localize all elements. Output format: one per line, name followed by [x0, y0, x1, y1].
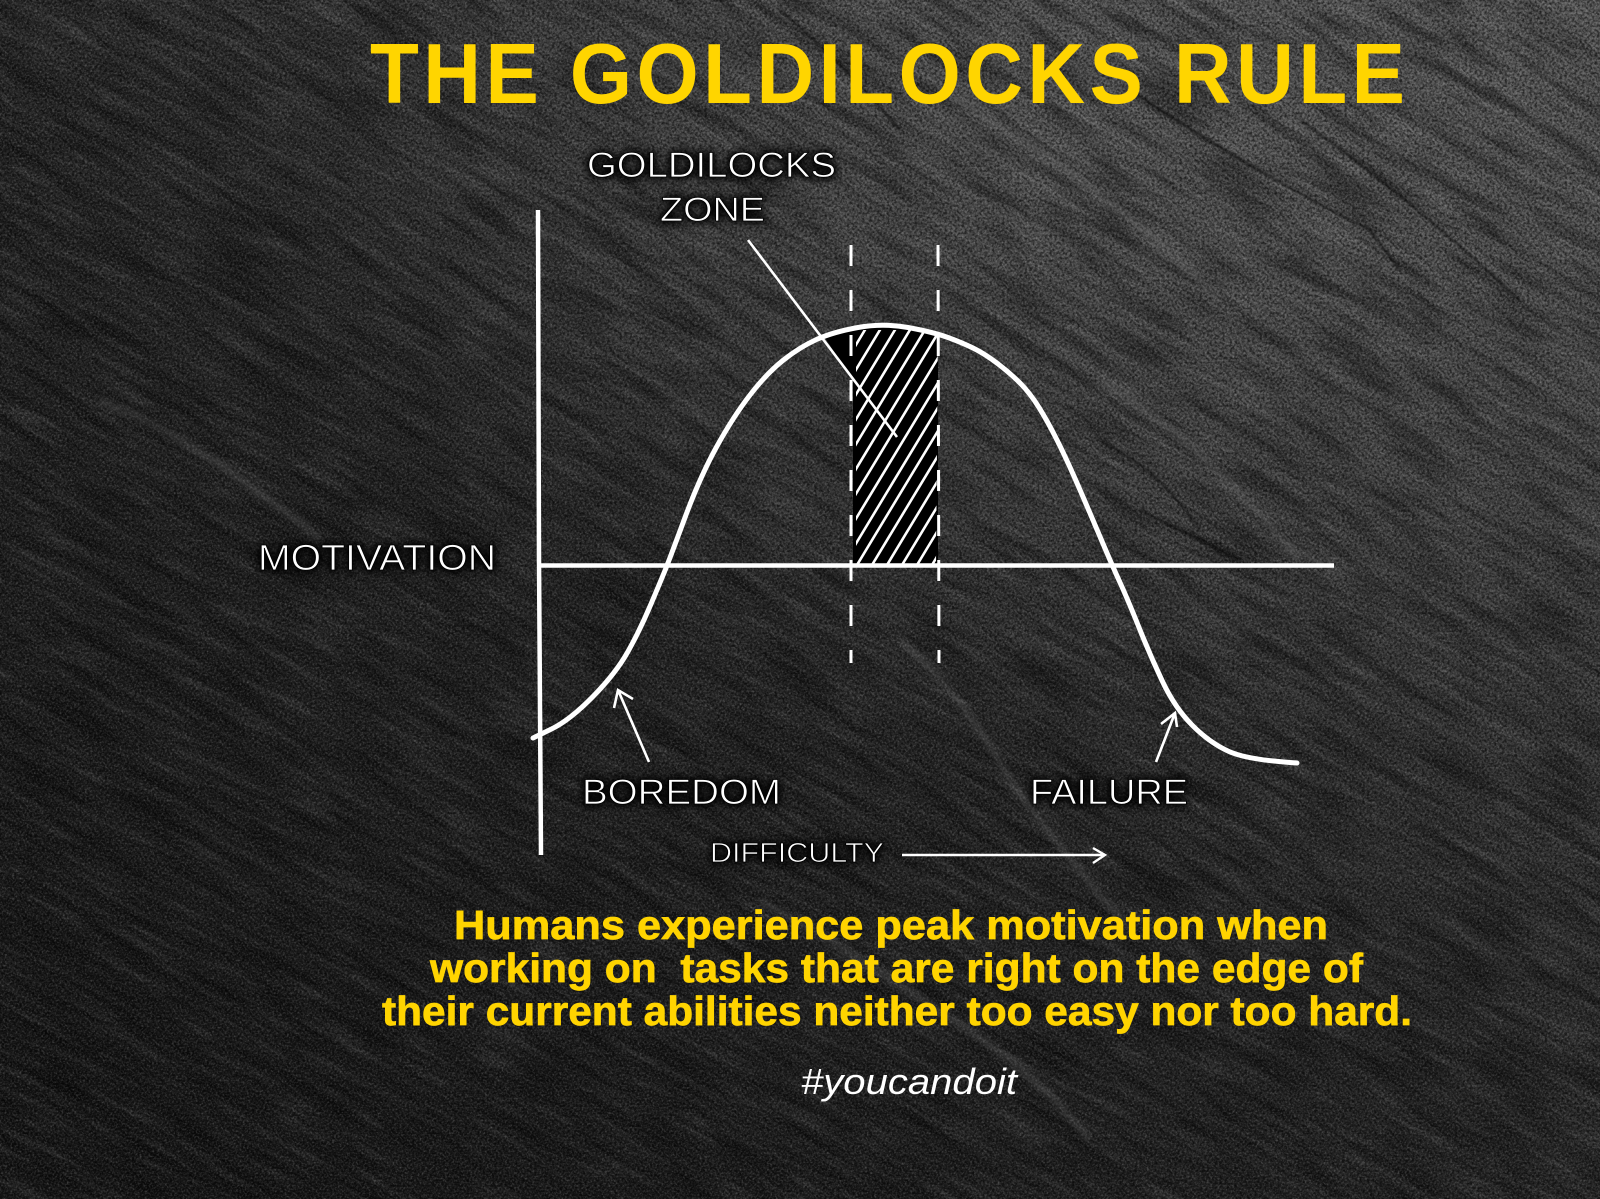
label: motivation: MOTIVATION [258, 537, 496, 578]
body text [382, 902, 1412, 1034]
label: zone: ZONE [660, 191, 765, 229]
arrow: boredom [614, 690, 649, 762]
label: boredom: BOREDOM [582, 773, 781, 812]
label: failure: FAILURE [1030, 773, 1188, 812]
chart: motivation vs difficulty curve [533, 210, 1334, 863]
goldilocks zone: hatched peak band [826, 328, 938, 564]
title: THE GOLDILOCKS RULE [370, 27, 1405, 122]
label: goldilocks: GOLDILOCKS [587, 146, 836, 185]
label: difficulty: DIFFICULTY [710, 837, 884, 868]
motivation curve [533, 325, 1297, 763]
body text: working on tasks that are right on the edge of [429, 945, 1363, 991]
x axis [540, 563, 1334, 568]
dashed zone boundary: left [850, 245, 852, 663]
body text: their current abilities neither too easy nor too hard. [382, 988, 1412, 1034]
y axis [538, 210, 541, 855]
arrow: failure [1156, 713, 1177, 762]
dashed zone boundary: right [938, 245, 939, 663]
arrow: difficulty [902, 848, 1105, 863]
hashtag: #youcandoit [801, 1061, 1019, 1102]
body text: Humans experience peak motivation when [454, 902, 1328, 948]
leader line to zone [748, 240, 897, 437]
